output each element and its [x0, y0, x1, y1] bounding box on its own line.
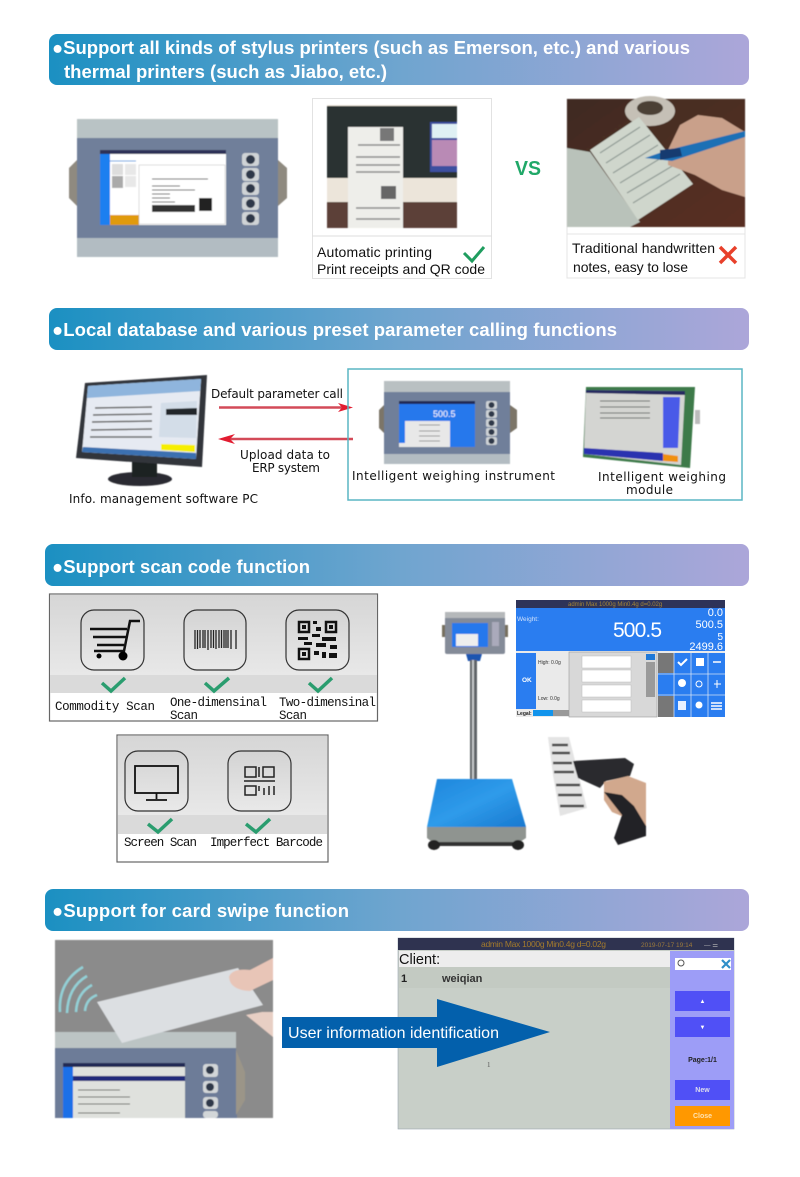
- weighing screen: admin Max 1000g Min0.4g d=0.02g: [568, 602, 662, 608]
- labels: scan types: Commodity Scan: [55, 700, 155, 714]
- label: module: [598, 470, 726, 497]
- weighing screen controls: Low: 0.0g: [538, 696, 560, 702]
- icon: barcode: [184, 610, 246, 670]
- labels: scan types: Scan: [279, 709, 307, 723]
- label: monitor caption: Info. management software PC: [69, 492, 258, 506]
- banner: scan code: ●Support scan code function: [52, 556, 310, 577]
- screen: client list: 1: [401, 973, 407, 985]
- screen: client list: — ⚌: [704, 942, 718, 949]
- weighing instrument: [379, 381, 517, 464]
- weighing screen controls: [516, 652, 725, 717]
- screen sidebar: ▲: [700, 999, 705, 1005]
- VS label: VS: [515, 158, 541, 180]
- screen: client list: admin Max 1000g Min0.4g d=0.02g: [481, 939, 606, 949]
- banner: card swipe: [45, 889, 749, 931]
- arrow: user information identification: [282, 999, 550, 1067]
- label: instrument: Intelligent weighing instrument: [352, 469, 555, 483]
- platform scale: [427, 612, 526, 850]
- banner: printers: ●Support all kinds of stylus printers (such as Emerson, etc.) and various: [52, 37, 690, 58]
- panel: two scan types: [117, 735, 328, 862]
- icon: cart: [81, 610, 144, 670]
- caption: automatic printing: Automatic printing: [317, 244, 432, 260]
- weighing screen: 5: [717, 632, 723, 643]
- labels: scan types: [124, 836, 323, 850]
- barcode scanner and receipt: [548, 737, 646, 845]
- checks: [148, 819, 270, 832]
- screen: client list: 2019-07-17 19:14: [641, 942, 693, 949]
- photo: hand writing in notebook: [567, 96, 745, 227]
- caption: handwritten notes: notes, easy to lose: [573, 259, 688, 275]
- weighing screen controls: OK: [522, 677, 532, 684]
- panel: handwritten notes: [567, 96, 745, 278]
- weighing screen controls: High: 0.0g: [538, 660, 561, 666]
- labels: scan types: Two-dimensinal: [279, 696, 376, 710]
- banner: printers: thermal printers (such as Jiabo, etc.): [64, 61, 387, 82]
- icon: check: [464, 247, 484, 261]
- arrow: default parameter call: Default parameter call: [211, 387, 343, 401]
- label: module: module: [626, 483, 673, 497]
- weighing screen: [516, 600, 725, 717]
- labels: scan types: [55, 696, 376, 723]
- screen sidebar: New: [695, 1087, 710, 1094]
- label: module: Intelligent weighing: [598, 470, 726, 484]
- photo: card swipe over instrument: [55, 940, 273, 1118]
- screen sidebar: [670, 951, 734, 1129]
- photo: printer with receipt: [327, 105, 457, 228]
- arrow: upload data: [218, 434, 353, 475]
- weighing screen: 500.5: [695, 619, 723, 631]
- panel: three scan types: [50, 594, 378, 723]
- labels: scan types: Screen Scan: [124, 836, 197, 850]
- banner: card swipe: ●Support for card swipe function: [52, 900, 349, 921]
- screen: client list: weiqian: [441, 973, 483, 985]
- arrow: default parameter call: [211, 387, 353, 412]
- caption: handwritten notes: Traditional handwritten: [572, 240, 715, 256]
- checks: [102, 678, 332, 691]
- labels: scan types: Imperfect Barcode: [210, 836, 323, 850]
- weighing screen: 500.5: [613, 619, 662, 642]
- screen: client list: 1: [487, 1061, 491, 1069]
- banner: local database: [49, 308, 749, 350]
- screen sidebar: Close: [693, 1113, 712, 1120]
- screen sidebar: Page:1/1: [688, 1057, 717, 1064]
- caption: automatic printing: Print receipts and QR code: [317, 261, 485, 277]
- weighing instrument: 500.5: [433, 409, 456, 419]
- screen sidebar: ▼: [700, 1025, 705, 1031]
- arrow: upload data: ERP system: [252, 461, 320, 475]
- screen: client list: [398, 938, 734, 1129]
- screen: client list: Client:: [399, 952, 440, 968]
- labels: scan types: One-dimensinal: [170, 696, 267, 710]
- banner: local database: ●Local database and various preset parameter calling functions: [52, 319, 617, 340]
- arrow: user information identification: User information identification: [288, 1025, 499, 1042]
- icon: red cross: [720, 247, 736, 263]
- banner: printers: [49, 34, 749, 85]
- weighing screen controls: Legal:: [517, 711, 532, 717]
- icon: screen: [125, 751, 188, 811]
- instrument showing print preview: [69, 119, 287, 257]
- icon: imperfect barcode: [228, 751, 291, 811]
- panel: automatic printing: [312, 98, 492, 278]
- caption: automatic printing: [312, 236, 492, 277]
- caption: handwritten notes: [572, 240, 715, 275]
- monitor: management software PC: [76, 375, 207, 486]
- icon: QR code: [286, 610, 349, 670]
- arrow: upload data: Upload data to: [240, 448, 330, 462]
- labels: scan types: Scan: [170, 709, 198, 723]
- weighing screen: Weight:: [517, 616, 539, 623]
- banner: scan code: [45, 544, 749, 586]
- weighing screen: 2499.6: [689, 641, 723, 653]
- weighing module: [583, 387, 700, 468]
- weighing screen: 0.0: [708, 607, 723, 619]
- panel: instrument and module: [348, 369, 742, 500]
